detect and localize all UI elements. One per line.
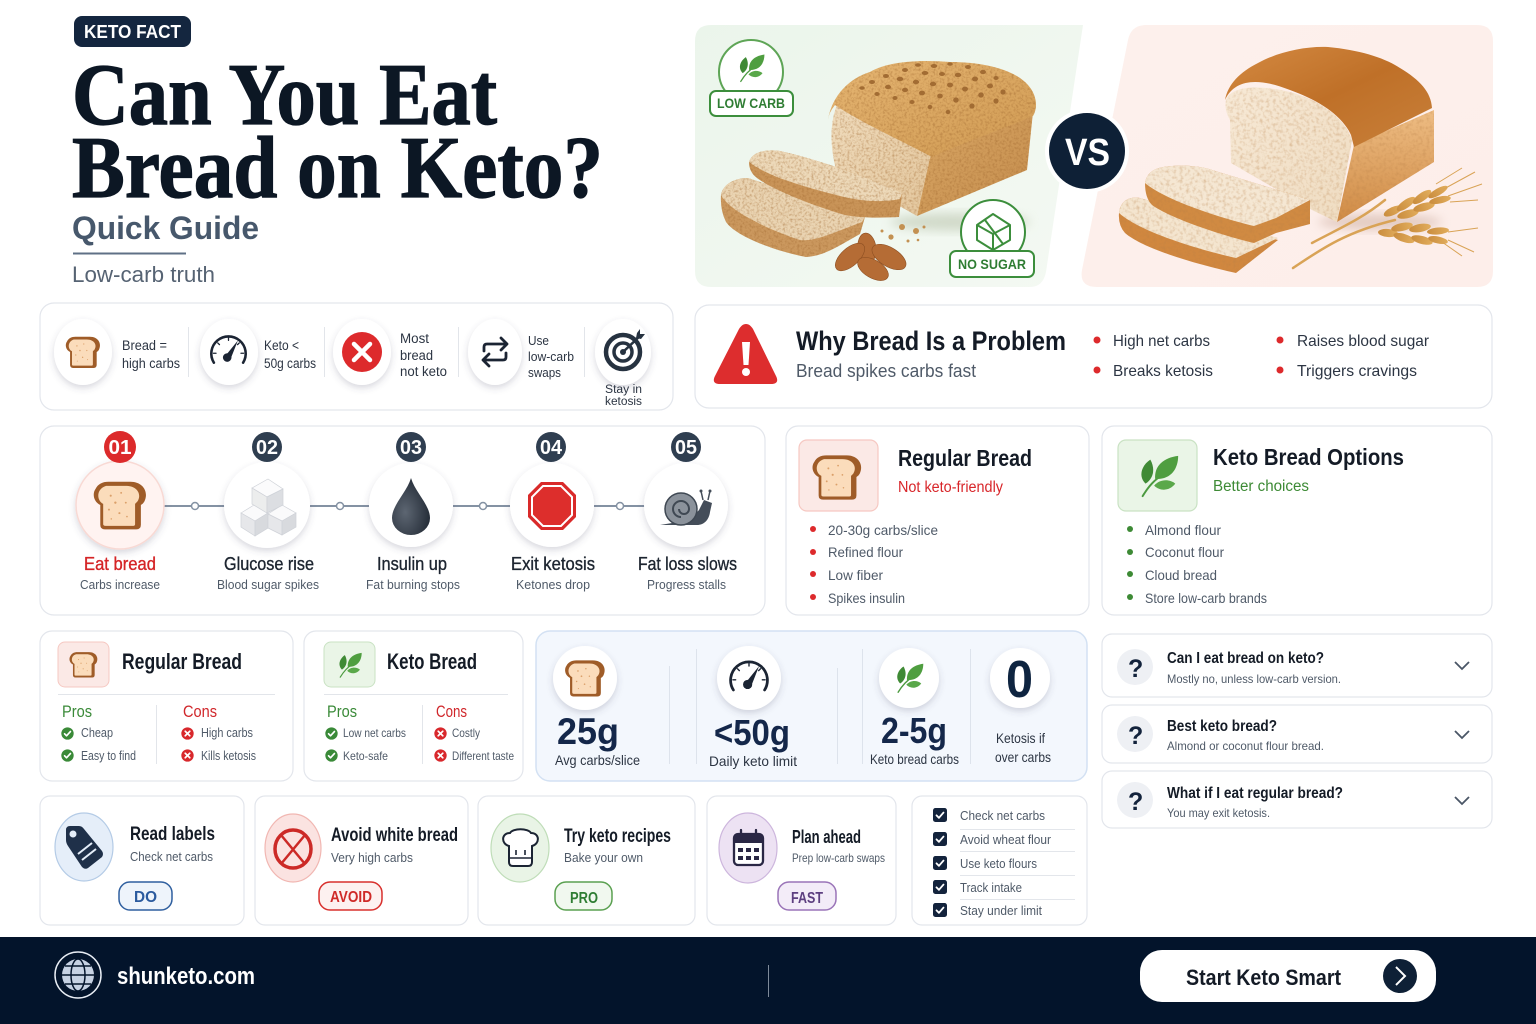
pros list: Easy to find [81,749,136,763]
card: plan ahead [707,796,896,925]
stat: daily limit: Daily keto limit [709,753,797,769]
card: checklist: Use keto flours [960,857,1037,871]
cons list: Costly [452,726,480,740]
pros list: Pros [62,702,92,721]
faq item 1: ? [1128,655,1143,683]
panel: process steps [40,426,765,615]
badge: vs [1045,109,1129,193]
step 4: exit ketosis: 04 [540,437,563,459]
badge: keto fact [74,16,191,47]
heading: why bread: Why Bread Is a Problem [796,326,1066,356]
illustration: regular loaf [1225,47,1442,230]
card: plan ahead: Plan ahead [792,827,861,847]
fact: low-carb swaps: Use [528,334,549,348]
card: try keto recipes: Bake your own [564,850,643,865]
fact: most bread not keto [333,319,447,385]
step 4: exit ketosis: Exit ketosis [511,554,595,574]
stat: keto bread carbs: 2-5g [881,710,947,751]
panel: regular bread hero [1082,25,1493,287]
faq item 3: What if I eat regular bread? [1167,785,1343,802]
stat: daily limit [709,646,797,769]
fact: keto limit: 50g carbs [264,356,316,371]
panel: keto bread hero [695,25,1083,287]
card: read labels [40,796,244,925]
pros list: Cheap [81,726,113,740]
step 5: fat loss slows: 05 [675,437,697,459]
pros list [61,702,136,763]
heading: Regular Bread [122,649,242,674]
faq item 2: ? [1128,722,1143,750]
fact: keto limit [200,319,316,385]
card: avoid white bread [255,796,468,925]
step 3: insulin up [366,432,460,592]
badge: no sugar: NO SUGAR [958,256,1026,272]
cons list: Different taste [452,749,514,763]
illustration: wheat [1293,168,1482,268]
illustration: keto loaf [828,61,1036,231]
step 4: exit ketosis: Ketones drop [516,577,590,592]
card: try keto recipes: Try keto recipes [564,826,671,847]
subheading: why bread: Bread spikes carbs fast [796,360,976,381]
step 1: eat bread: 01 [108,437,132,459]
list: keto options: Coconut flour [1145,544,1224,560]
cons list: Kills ketosis [201,749,256,763]
pros list [325,702,406,763]
list: problems: Triggers cravings [1297,363,1417,380]
faq item 3: ? [1128,788,1143,816]
panel: faq [1102,634,1492,828]
list: regular bread facts: Spikes insulin [828,590,905,606]
card: checklist [912,796,1087,925]
faq item 3: You may exit ketosis. [1167,806,1270,820]
list: regular bread facts [810,522,938,606]
card: read labels: Read labels [130,824,215,845]
faq item 1: Mostly no, unless low-carb version. [1167,672,1341,686]
title: Bread on Keto? [72,120,603,217]
stat: average carbs [553,646,640,768]
cons list: Cons [436,702,467,721]
fact: most bread not keto: Most [400,331,429,346]
icon: leaf tile [1118,440,1197,511]
footer bar [0,937,1536,1024]
step 1: eat bread: Eat bread [84,554,156,574]
list: regular bread facts: Low fiber [828,567,883,583]
stat: average carbs: Avg carbs/slice [555,752,640,768]
fact: low-carb swaps [468,319,574,385]
title: Can You Eat [72,47,497,144]
panel: why bread is a problem [695,305,1492,408]
faq item 2 [1102,705,1492,763]
step 3: insulin up: Insulin up [377,554,447,574]
step 4: exit ketosis [510,432,595,592]
icon: leaf tile [324,642,375,687]
stat: ketosis: over carbs [995,749,1051,765]
faq item 3 [1102,771,1492,828]
step 2: glucose rise: 02 [256,437,278,459]
step 3: insulin up: 03 [400,437,422,459]
illustration: almonds and crumbs [831,224,926,285]
card: try keto recipes [478,796,695,925]
card: read labels: DO [134,889,157,906]
step 1: eat bread: Carbs increase [80,577,160,592]
tagline: Low-carb truth [72,262,215,287]
panel: regular bread details [786,426,1089,615]
fact: low-carb swaps: low-carb [528,350,574,364]
list: regular bread facts: Refined flour [828,544,903,560]
stat: ketosis: 0 [1006,651,1033,709]
list: problems: Breaks ketosis [1113,363,1213,380]
heading: Keto Bread [387,649,477,674]
step 5: fat loss slows: Fat loss slows [638,554,737,574]
fact: keto limit: Keto < [264,338,299,353]
fact: stay in ketosis: ketosis [605,396,642,408]
website: shunketo.com [117,963,255,990]
button: start keto smart [1140,950,1436,1002]
fact: most bread not keto: bread [400,348,433,363]
stat: ketosis: Ketosis if [996,730,1045,746]
badge: vs: VS [1065,132,1110,174]
stat: average carbs: 25g [557,711,619,752]
step 5: fat loss slows: Progress stalls [647,577,726,592]
subheading: not keto-friendly: Not keto-friendly [898,479,1003,496]
fact: bread high carbs [54,319,180,385]
pros list: Pros [327,702,357,721]
fact: bread high carbs: high carbs [122,356,180,371]
card: avoid white bread: AVOID [330,889,372,906]
card: try keto recipes: PRO [570,890,598,907]
step 1: eat bread [76,431,164,592]
card: checklist: Avoid wheat flour [960,833,1051,847]
cons list [181,702,256,763]
heading: regular bread: Regular Bread [898,445,1032,471]
list: keto options: Store low-carb brands [1145,590,1267,606]
button: start keto smart: Start Keto Smart [1186,965,1342,990]
faq item 1: Can I eat bread on keto? [1167,650,1324,667]
card: checklist: Track intake [960,881,1022,895]
panel: keto bread options [1102,426,1492,615]
icon: toast tile [799,440,878,511]
faq item 2: Almond or coconut flour bread. [1167,739,1324,753]
fact: bread high carbs: Bread = [122,338,167,353]
card: plan ahead: Prep low-carb swaps [792,851,885,865]
faq item 1 [1102,634,1492,697]
card: plan ahead: FAST [791,890,823,907]
panel: keto bread pros and cons [304,631,523,781]
pros list: Low net carbs [343,726,406,740]
list: problems [1094,333,1430,380]
title [72,47,603,217]
illustration: keto slices [721,150,902,257]
step 2: glucose rise [217,432,319,592]
fact: stay in ketosis [595,319,651,408]
panel: quick facts strip [40,303,673,410]
step 5: fat loss slows [638,432,737,592]
icon: globe [55,952,101,998]
fact: stay in ketosis: Stay in [605,384,642,396]
step 2: glucose rise: Blood sugar spikes [217,577,319,592]
list: regular bread facts: 20-30g carbs/slice [828,522,938,538]
badge: no sugar [950,200,1034,277]
stat: daily limit: <50g [714,712,790,753]
faq item 2: Best keto bread? [1167,718,1277,735]
stat: keto bread carbs: Keto bread carbs [870,751,959,767]
icon: warning triangle [714,324,777,384]
subtitle: quick guide: Quick Guide [72,210,259,246]
list: problems: High net carbs [1113,333,1210,350]
subheading: better choices: Better choices [1213,478,1309,495]
list: keto options: Almond flour [1145,522,1221,538]
badge: low carb: LOW CARB [717,95,785,111]
icon: toast tile [58,642,109,687]
fact: low-carb swaps: swaps [528,366,561,380]
badge: keto fact: KETO FACT [84,22,181,42]
card: checklist: Stay under limit [960,904,1042,918]
connectors [164,502,645,510]
illustration: regular slices [1119,166,1310,273]
card: avoid white bread: Avoid white bread [331,825,458,846]
pros list: Keto-safe [343,749,388,763]
panel: regular bread pros and cons [40,631,293,781]
fact: most bread not keto: not keto [400,364,447,379]
panel: key numbers [536,631,1087,781]
cons list: High carbs [201,726,253,740]
card: read labels: Check net carbs [130,849,213,864]
cons list: Cons [183,702,217,721]
cons list [434,702,514,763]
card: checklist: Check net carbs [960,809,1045,823]
step 3: insulin up: Fat burning stops [366,577,460,592]
card: avoid white bread: Very high carbs [331,850,413,865]
stat: keto bread carbs [870,648,959,767]
stat: ketosis [990,648,1051,765]
list: keto options: Cloud bread [1145,567,1217,583]
list: keto options [1127,522,1267,606]
heading: keto bread options: Keto Bread Options [1213,444,1404,470]
badge: low carb [710,40,793,116]
list: problems: Raises blood sugar [1297,333,1430,350]
step 2: glucose rise: Glucose rise [224,554,314,574]
